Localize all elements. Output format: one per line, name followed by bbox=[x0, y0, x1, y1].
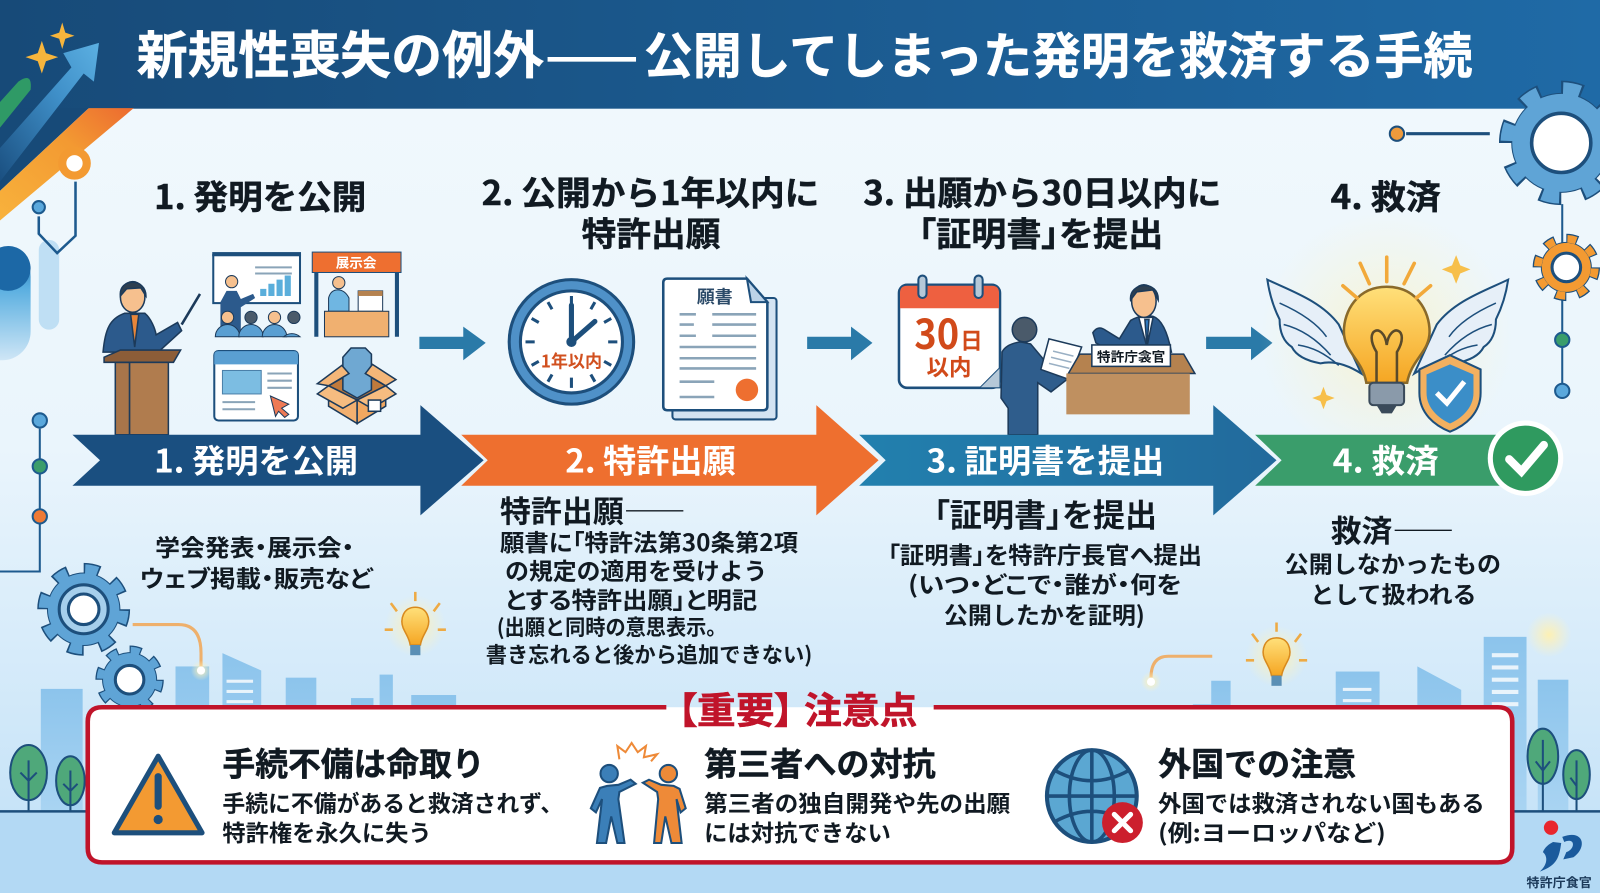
circuit line left top bbox=[33, 151, 87, 253]
note 2 text bbox=[704, 739, 1010, 848]
step 3 heading bbox=[863, 166, 1221, 256]
gear left small bbox=[100, 650, 159, 709]
gear left large bbox=[44, 569, 123, 649]
step 2 heading bbox=[482, 166, 819, 256]
title: 公開してしまった発明を救済する手続 bbox=[644, 17, 1472, 88]
title: —— bbox=[545, 17, 639, 88]
icon: 30-day calendar: 30 bbox=[914, 302, 959, 361]
gear right large bbox=[1507, 89, 1600, 197]
note 2 text: 第三者の独自開発や先の出願 bbox=[704, 784, 1010, 818]
icon: web page bbox=[214, 351, 298, 420]
circuit right bbox=[1555, 204, 1569, 398]
icon: conference slide bbox=[212, 252, 301, 337]
text: step 2 detail: の規定の適用を受けよう bbox=[505, 553, 767, 587]
step 4 heading: 4. 救済 bbox=[1331, 170, 1441, 219]
text: step 4 detail: として扱われる bbox=[1310, 576, 1477, 610]
text: step 2 detail: とする特許出願」と明記 bbox=[505, 581, 757, 615]
banner arrow 4 bbox=[1255, 435, 1510, 486]
text: step 3 detail: 「証明書」を提出 bbox=[934, 491, 1157, 537]
icon: exhibition booth bbox=[312, 252, 401, 337]
title bbox=[137, 14, 1472, 88]
text: step 1 detail bbox=[140, 529, 375, 594]
icon: small bulb left bbox=[385, 592, 446, 656]
step 1 heading: 1. 発明を公開 bbox=[154, 170, 366, 219]
banner arrow 2 bbox=[461, 405, 879, 515]
icon: two people confronting bbox=[591, 743, 686, 843]
banner arrow 2: 2. 特許出願 bbox=[565, 436, 736, 483]
icon: 30-day calendar bbox=[899, 276, 1000, 388]
text: step 4 detail: 公開しなかったもの bbox=[1285, 546, 1501, 580]
ground band bbox=[0, 811, 1600, 893]
icon: product box bbox=[317, 348, 396, 424]
icon: application document bbox=[663, 279, 777, 419]
icon: exhibition booth: 展示会 bbox=[336, 252, 377, 271]
note 1 text: 手続不備は命取り bbox=[222, 739, 485, 786]
ground line bbox=[0, 810, 1600, 813]
text: step 2 detail: 書き忘れると後から追加できない) bbox=[486, 638, 812, 669]
notes heading bbox=[678, 681, 917, 735]
trees right bbox=[1528, 729, 1590, 811]
city skyline bbox=[41, 637, 1568, 811]
banner arrow 1: 1. 発明を公開 bbox=[154, 436, 358, 483]
header band bbox=[0, 0, 1600, 109]
text: step 3 detail bbox=[888, 491, 1202, 631]
icon: 30-day calendar: 以内 bbox=[927, 351, 971, 383]
title: 新規性喪失の例外 bbox=[137, 14, 544, 88]
circuit line left bottom bbox=[0, 413, 47, 572]
icon: check badge bbox=[1488, 420, 1563, 496]
icon: warning triangle bbox=[114, 756, 202, 833]
banner arrow 3: 3. 証明書を提出 bbox=[927, 436, 1164, 483]
note 3 text: (例:ヨーロッパなど) bbox=[1158, 814, 1386, 848]
notes heading: 【重要】 bbox=[678, 681, 794, 735]
text: step 2 detail bbox=[486, 487, 812, 669]
banner arrow 4: 4. 救済 bbox=[1333, 436, 1439, 483]
decoration: diagonal stripes and arrow bbox=[0, 22, 134, 220]
step 3 heading: 3. 出願から30日以内に bbox=[863, 166, 1221, 215]
note 1 text bbox=[222, 739, 563, 848]
gear right orange bbox=[1538, 239, 1595, 296]
step 2 heading: 2. 公開から1年以内に bbox=[482, 166, 819, 215]
icon: applicant with document bbox=[1001, 317, 1082, 435]
text: step 4 detail: 救済—— bbox=[1331, 506, 1454, 551]
text: step 4 detail bbox=[1285, 506, 1501, 610]
trees left bbox=[10, 745, 85, 811]
icon: bulb with wings and shield bbox=[1259, 209, 1514, 464]
icon: clock: 1年以内 bbox=[541, 347, 602, 372]
arrow 2 to 3 bbox=[807, 327, 872, 360]
text: step 3 detail: 「証明書」を特許庁長官へ提出 bbox=[888, 536, 1202, 570]
text: step 2 detail: 願書に「特許法第30条第2項 bbox=[500, 524, 799, 558]
text: step 1 detail: ウェブ掲載・販売など bbox=[140, 560, 375, 594]
icon: clock bbox=[509, 280, 634, 404]
connector with glow right bbox=[1141, 656, 1212, 692]
icon: globe with cross bbox=[1047, 750, 1143, 843]
icon: application document: 願書 bbox=[697, 283, 733, 308]
logo bbox=[1527, 821, 1592, 891]
text: step 3 detail: (いつ・どこで・誰が・何を bbox=[908, 566, 1182, 600]
icon: 30-day calendar: 日 bbox=[960, 324, 983, 356]
arrow 1 to 2 bbox=[419, 327, 486, 360]
connector right top bbox=[1390, 127, 1490, 141]
icon: small bulb right bbox=[1246, 623, 1307, 687]
note 2 text: には対抗できない bbox=[704, 814, 891, 848]
note 3 text: 外国では救済されない国もある bbox=[1158, 784, 1485, 818]
step 3 heading: 「証明書」を提出 bbox=[918, 207, 1163, 256]
note 3 text: 外国での注意 bbox=[1158, 739, 1356, 786]
icon: patent office official at desk bbox=[1066, 285, 1195, 414]
logo: 特許庁食官 bbox=[1527, 872, 1592, 891]
text: step 2 detail: (出願と同時の意思表示。 bbox=[497, 611, 727, 642]
icon: presenter at podium bbox=[103, 282, 200, 435]
arrow 3 to 4 bbox=[1206, 327, 1272, 360]
text: step 2 detail: 特許出願—— bbox=[500, 487, 686, 532]
icon: patent office official at desk: 特許庁衾官 bbox=[1097, 346, 1165, 365]
notes heading: 注意点 bbox=[804, 681, 917, 735]
step 2 heading: 特許出願 bbox=[582, 207, 721, 256]
banner arrow 1 bbox=[72, 405, 484, 515]
glow right bbox=[1527, 612, 1571, 657]
panel: important notes bbox=[88, 681, 1512, 862]
note 3 text bbox=[1158, 739, 1485, 848]
note 1 text: 手続に不備があると救済されず、 bbox=[222, 784, 563, 818]
connector with glow left bbox=[133, 625, 211, 681]
text: step 1 detail: 学会発表・展示会・ bbox=[155, 529, 354, 563]
decorative capsules bbox=[0, 240, 59, 360]
note 1 text: 特許権を永久に失う bbox=[222, 814, 432, 848]
text: step 3 detail: 公開したかを証明) bbox=[944, 597, 1145, 631]
note 2 text: 第三者への対抗 bbox=[704, 739, 936, 786]
banner arrow 3 bbox=[859, 405, 1277, 515]
